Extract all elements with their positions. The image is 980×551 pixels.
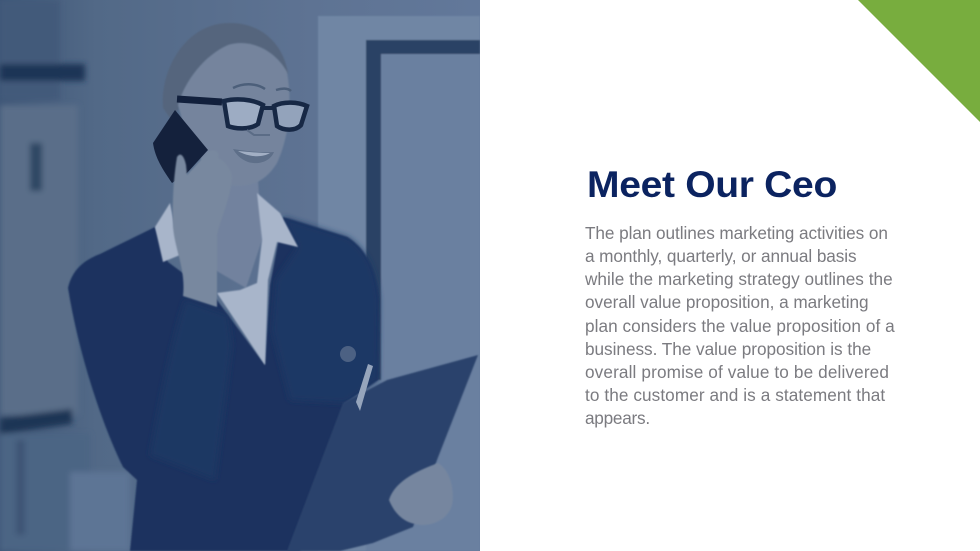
shirt collar and front	[155, 193, 298, 365]
body text: business. The value proposition is the	[585, 339, 871, 359]
jacket sleeve shading	[150, 300, 232, 480]
office background	[0, 0, 480, 551]
body text: while the marketing strategy outlines the	[585, 269, 893, 289]
body text: to the customer and is a statement that	[585, 385, 885, 405]
body text: overall value proposition, a marketing	[585, 292, 869, 312]
body text	[585, 223, 895, 428]
body text: plan considers the value proposition of a	[585, 316, 895, 336]
hand holding clipboard	[389, 463, 453, 525]
woman figure	[68, 23, 478, 551]
body text: The plan outlines marketing activities on	[585, 223, 888, 243]
glasses	[177, 99, 307, 130]
nose shadow	[247, 130, 270, 135]
right lapel	[272, 217, 379, 403]
neck	[205, 180, 262, 288]
hand holding phone	[173, 150, 232, 307]
background shelves and cabinet	[0, 0, 130, 551]
photo: CEO on the phone with blue overlay	[0, 0, 480, 551]
jacket	[68, 217, 379, 551]
face	[178, 43, 290, 186]
clipboard	[287, 355, 478, 551]
hair	[163, 23, 288, 118]
body text: overall promise of value to be delivered	[585, 362, 889, 382]
lapel button	[340, 346, 356, 362]
body text: appears.	[585, 408, 650, 428]
green corner triangle	[858, 0, 980, 122]
mouth	[233, 149, 274, 163]
pen in pocket	[356, 364, 373, 411]
eyebrows	[233, 84, 291, 91]
title: Meet Our Ceo	[587, 164, 837, 205]
phone	[153, 110, 208, 183]
background window	[318, 16, 480, 551]
body text: a monthly, quarterly, or annual basis	[585, 246, 857, 266]
